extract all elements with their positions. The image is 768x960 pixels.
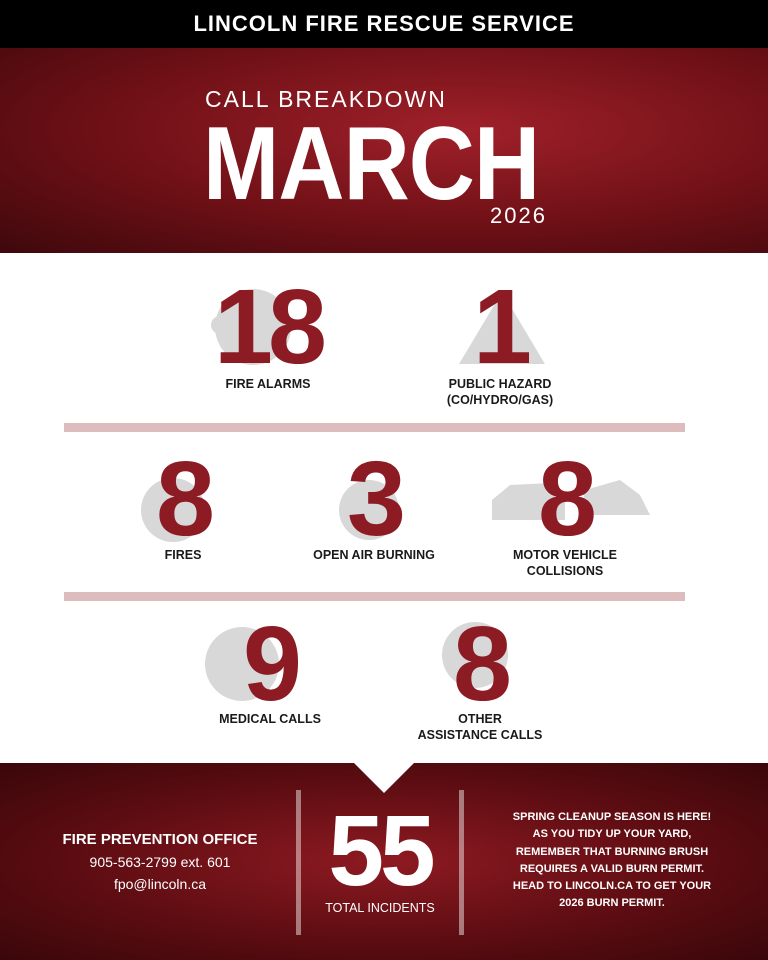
total incidents (296, 790, 464, 935)
icon: fire (339, 480, 398, 540)
arrow: pointer triangle (354, 763, 414, 793)
burn permit message: AS YOU TIDY UP YOUR YARD, (533, 828, 691, 840)
stat: other assistance: 8 (453, 605, 507, 723)
stat: public hazard: PUBLIC HAZARD (449, 377, 551, 391)
hero subtitle: CALL BREAKDOWN (205, 86, 447, 112)
header bar: LINCOLN FIRE RESCUE SERVICE (193, 11, 575, 36)
icon: alarm bell (211, 289, 291, 365)
icon: medical cross (205, 627, 279, 701)
stat: fire alarms: FIRE ALARMS (226, 377, 310, 391)
stat: open air burning: OPEN AIR BURNING (313, 548, 435, 562)
stat: other assistance: ASSISTANCE CALLS (418, 728, 542, 742)
stat: fires: FIRES (165, 548, 201, 562)
burn permit message: SPRING CLEANUP SEASON IS HERE! (513, 811, 711, 823)
stat: motor vehicle collisions: COLLISIONS (527, 564, 603, 578)
footer panel (0, 763, 768, 960)
total incidents: TOTAL INCIDENTS (325, 901, 435, 915)
burn permit message: REQUIRES A VALID BURN PERMIT. (520, 863, 704, 875)
stat: medical calls: MEDICAL CALLS (219, 712, 321, 726)
stat: motor vehicle collisions: MOTOR VEHICLE (513, 548, 617, 562)
burn permit message: HEAD TO LINCOLN.CA TO GET YOUR (513, 880, 711, 892)
icon: cars (492, 480, 650, 520)
stat: fire alarms: 18 (214, 268, 322, 386)
stat: public hazard: 1 (473, 268, 527, 386)
hero title: MARCH (203, 106, 539, 222)
stat: public hazard (447, 268, 553, 407)
icon: phone (442, 622, 508, 688)
burn permit message: REMEMBER THAT BURNING BRUSH (516, 846, 708, 858)
stat: open air burning (313, 440, 435, 562)
contact info: fpo@lincoln.ca (114, 876, 206, 892)
contact info: FIRE PREVENTION OFFICE (62, 831, 258, 848)
hero year: 2026 (490, 203, 547, 228)
stat: motor vehicle collisions (492, 440, 650, 578)
contact info (62, 831, 258, 892)
stat: fires: 8 (156, 440, 210, 558)
contact info: 905-563-2799 ext. 601 (90, 854, 230, 870)
hero banner (0, 48, 768, 253)
stat: public hazard: (CO/HYDRO/GAS) (447, 393, 553, 407)
stat: open air burning: 3 (347, 440, 401, 558)
stat: medical calls (205, 605, 321, 726)
burn permit message (513, 811, 711, 909)
icon: flame (141, 478, 203, 542)
total incidents: 55 (328, 795, 432, 907)
burn permit message: 2026 BURN PERMIT. (559, 897, 665, 909)
icon: warning triangle (459, 302, 545, 364)
stat: other assistance (418, 605, 542, 742)
stat: motor vehicle collisions: 8 (538, 440, 592, 558)
header bar (0, 0, 768, 48)
stat: other assistance: OTHER (458, 712, 502, 726)
stat: medical calls: 9 (243, 605, 297, 723)
